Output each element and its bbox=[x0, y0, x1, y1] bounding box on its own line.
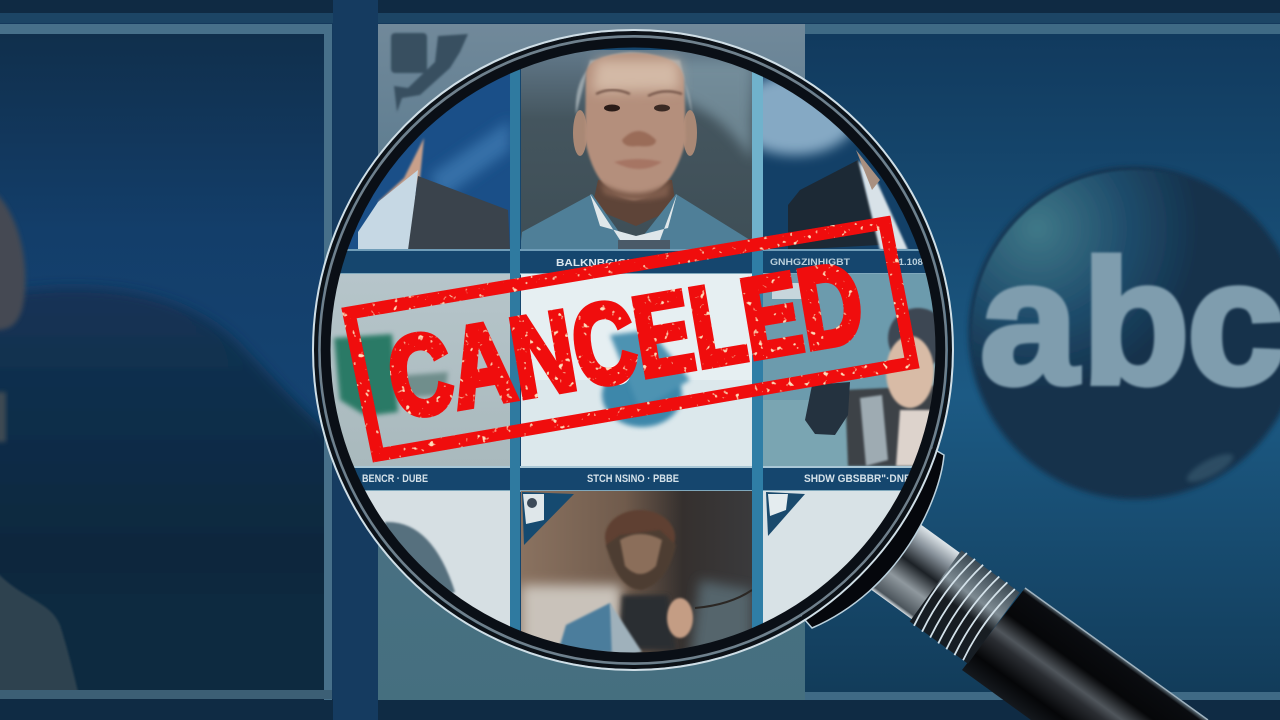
neck bbox=[592, 180, 676, 226]
man with hat bbox=[604, 510, 676, 545]
woman face bbox=[886, 336, 934, 408]
stamp: CANCELED bbox=[349, 223, 912, 455]
grid cell: mid right card bbox=[763, 274, 948, 466]
magnifying glass black grip bbox=[962, 588, 1208, 720]
shirt collar bbox=[590, 194, 677, 240]
caption band row 2: SHDW GBSBBR"·DNBE bbox=[804, 473, 918, 485]
blurred shoulder at lower left bbox=[0, 574, 78, 690]
grid cell: bottom left card bbox=[366, 491, 510, 626]
panel: left blurred show card bbox=[0, 24, 345, 710]
mouth bbox=[614, 159, 662, 169]
caption band row 2: STCH NSINO · PBBE bbox=[587, 473, 679, 485]
brows and eyes bbox=[596, 90, 682, 96]
blurred head at left edge bbox=[0, 188, 25, 330]
threaded collar bbox=[909, 549, 1020, 665]
hand bbox=[667, 598, 693, 638]
magnifying glass neck and collar bbox=[865, 518, 1020, 665]
grid cell: bottom right card bbox=[763, 491, 900, 624]
stamp word: CANCELED bbox=[379, 239, 872, 444]
caption band row 1: BALKNBGIGIGT bbox=[556, 257, 647, 269]
jacket bbox=[520, 194, 752, 250]
vertical dividers bbox=[510, 50, 763, 670]
corner icon bbox=[522, 492, 574, 545]
stamp border bbox=[349, 223, 912, 455]
panel: right abc card bbox=[805, 24, 1280, 700]
ears bbox=[573, 110, 587, 156]
abc logo bbox=[968, 166, 1280, 500]
dark blurred silhouette bbox=[0, 286, 324, 690]
grid cell: mid center card bbox=[521, 274, 752, 466]
dark sleeve bbox=[805, 382, 850, 435]
caption band row 1 bbox=[330, 249, 940, 275]
blue shirt bbox=[559, 602, 613, 652]
face bbox=[585, 53, 686, 200]
grid cell: top left portrait bbox=[348, 74, 510, 249]
caption band row 1: GNHGZINHIGBT bbox=[770, 257, 850, 268]
lens rim bbox=[313, 30, 953, 670]
metal neck bbox=[868, 521, 963, 621]
caption band row 2: BENCR · DUBE bbox=[362, 473, 428, 485]
grid cell: mid left card bbox=[330, 274, 510, 466]
hair bbox=[576, 52, 692, 115]
caption band row 1: 01.108 bbox=[893, 257, 923, 268]
grid cell: top center portrait bbox=[520, 50, 752, 250]
icon: faded badge bbox=[391, 33, 468, 112]
lens content: grid of shows bbox=[330, 48, 936, 652]
abc logo: abc bbox=[980, 225, 1280, 421]
woman hair bbox=[886, 306, 936, 365]
grid cell: bottom center portrait bbox=[521, 491, 752, 661]
lens bezel bracket bbox=[700, 400, 944, 628]
nose bbox=[622, 131, 656, 146]
grey blouse bbox=[860, 395, 888, 466]
grid cell: top right portrait bbox=[763, 77, 909, 249]
caption band row 2 bbox=[330, 466, 940, 492]
panel: middle card behind the lens bbox=[378, 24, 806, 700]
